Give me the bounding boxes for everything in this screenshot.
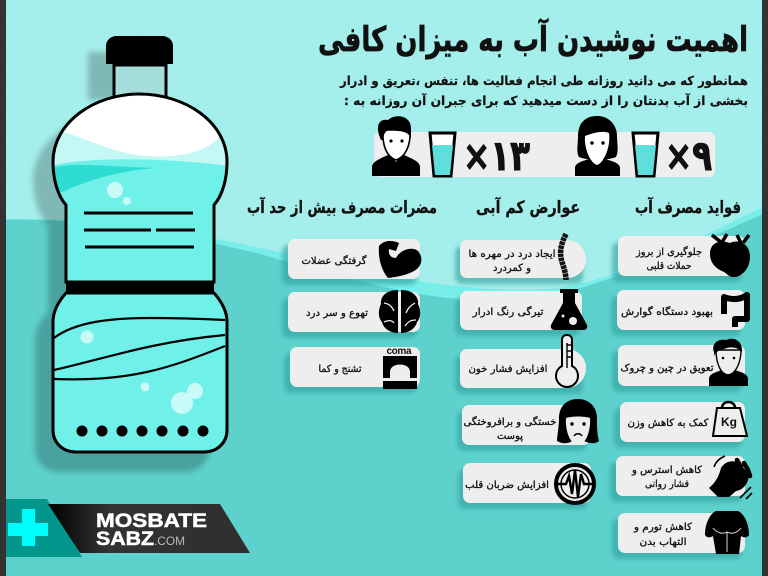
intro text (339, 73, 748, 108)
card: back pain (455, 234, 586, 284)
column: dehydration symptoms (455, 234, 599, 509)
bottle band (66, 282, 214, 293)
card: fast heartbeat (458, 463, 594, 509)
card: high blood pressure (455, 335, 586, 394)
card: tired skin: خستگی و برافروختگی (464, 416, 556, 428)
card: heart attack prevention (612, 234, 750, 282)
daily water intake panel (372, 116, 715, 180)
card: delayed wrinkles: تعویق در چین و چروک (620, 363, 714, 374)
intro text: بخشی از آب بدنتان را از دست میدهید که برای جبران آن روزانه به : (344, 93, 748, 108)
bubbles (80, 182, 203, 414)
card: inflammation reduction (612, 511, 749, 559)
card: inflammation reduction: التهاب بدن (640, 537, 686, 548)
card: inflammation reduction: کاهش تورم و (633, 522, 692, 533)
card: stress reduction (610, 456, 752, 502)
card: seizure and coma: coma (386, 346, 412, 357)
bottle upper body (50, 90, 230, 285)
card: tired skin: پوست (497, 431, 523, 442)
card: dark urine (455, 289, 587, 336)
icon: glass for men (430, 133, 455, 176)
card: seizure and coma (284, 346, 420, 393)
card: weight loss: کمک به کاهش وزن (628, 418, 709, 429)
bottle ridges (54, 318, 225, 379)
card: seizure and coma: تشنج و کما (318, 364, 362, 375)
card: muscle cramps (282, 239, 421, 285)
bottle neck (114, 65, 166, 97)
card: back pain: ایجاد درد در مهره ها (468, 249, 556, 260)
icon: medical cross (8, 509, 48, 546)
logo text: .COM (154, 534, 185, 548)
card: weight loss (614, 402, 747, 448)
column: overuse harms (282, 239, 421, 393)
card: digestion (611, 290, 747, 336)
logo text: SABZ (96, 529, 154, 550)
card: heart attack prevention: حملات قلبی (646, 261, 692, 272)
card: stress reduction: کاهش استرس و (631, 465, 702, 476)
card: fast heartbeat: افزایش ضربان قلب (465, 480, 549, 491)
bottle shadow (33, 52, 209, 472)
card: stress reduction: فشار روانی (645, 479, 689, 490)
intro text: همانطور که می دانید روزانه طی انجام فعالیت ها، تنفس ،تعریق و ادرار (339, 73, 748, 89)
card: delayed wrinkles (612, 339, 748, 392)
card: weight loss: Kg (721, 415, 737, 429)
card: nausea and headache: تهوع و سر درد (306, 308, 368, 319)
card: nausea and headache (282, 290, 420, 338)
label lines (84, 213, 195, 247)
icon: man (372, 116, 420, 176)
heading: benefits: فواید مصرف آب (635, 196, 741, 218)
logo (6, 499, 250, 557)
card: tired skin (457, 399, 599, 451)
card: back pain: و کمردرد (493, 263, 531, 274)
women glasses count: ×۹ (665, 131, 712, 180)
logo dark banner (48, 504, 250, 553)
icon: woman (575, 116, 620, 176)
card: high blood pressure: افزایش فشار خون (468, 364, 548, 375)
logo text: MOSBATE (96, 511, 207, 532)
card: heart attack prevention: جلوگیری از بروز (635, 246, 702, 258)
heading: overuse harms: مضرات مصرف بیش از حد آب (247, 196, 437, 218)
column: benefits (610, 234, 752, 559)
icon: glass for women (633, 133, 658, 176)
card: muscle cramps: گرفتگی عضلات (302, 255, 367, 267)
intake bar (374, 132, 715, 177)
card: digestion: بهبود دستگاه گوارش (621, 306, 713, 318)
logo text (96, 511, 207, 550)
water bottle illustration (50, 36, 230, 452)
men glasses count: ×۱۳ (463, 131, 530, 180)
heading: dehydration symptoms: عوارض کم آبی (476, 196, 580, 218)
bottle dots (76, 426, 208, 436)
logo teal tab (6, 499, 82, 557)
card: dark urine: تیرگی رنگ ادرار (471, 306, 544, 318)
bottle cap (106, 36, 173, 64)
bottle lower body (53, 293, 227, 452)
